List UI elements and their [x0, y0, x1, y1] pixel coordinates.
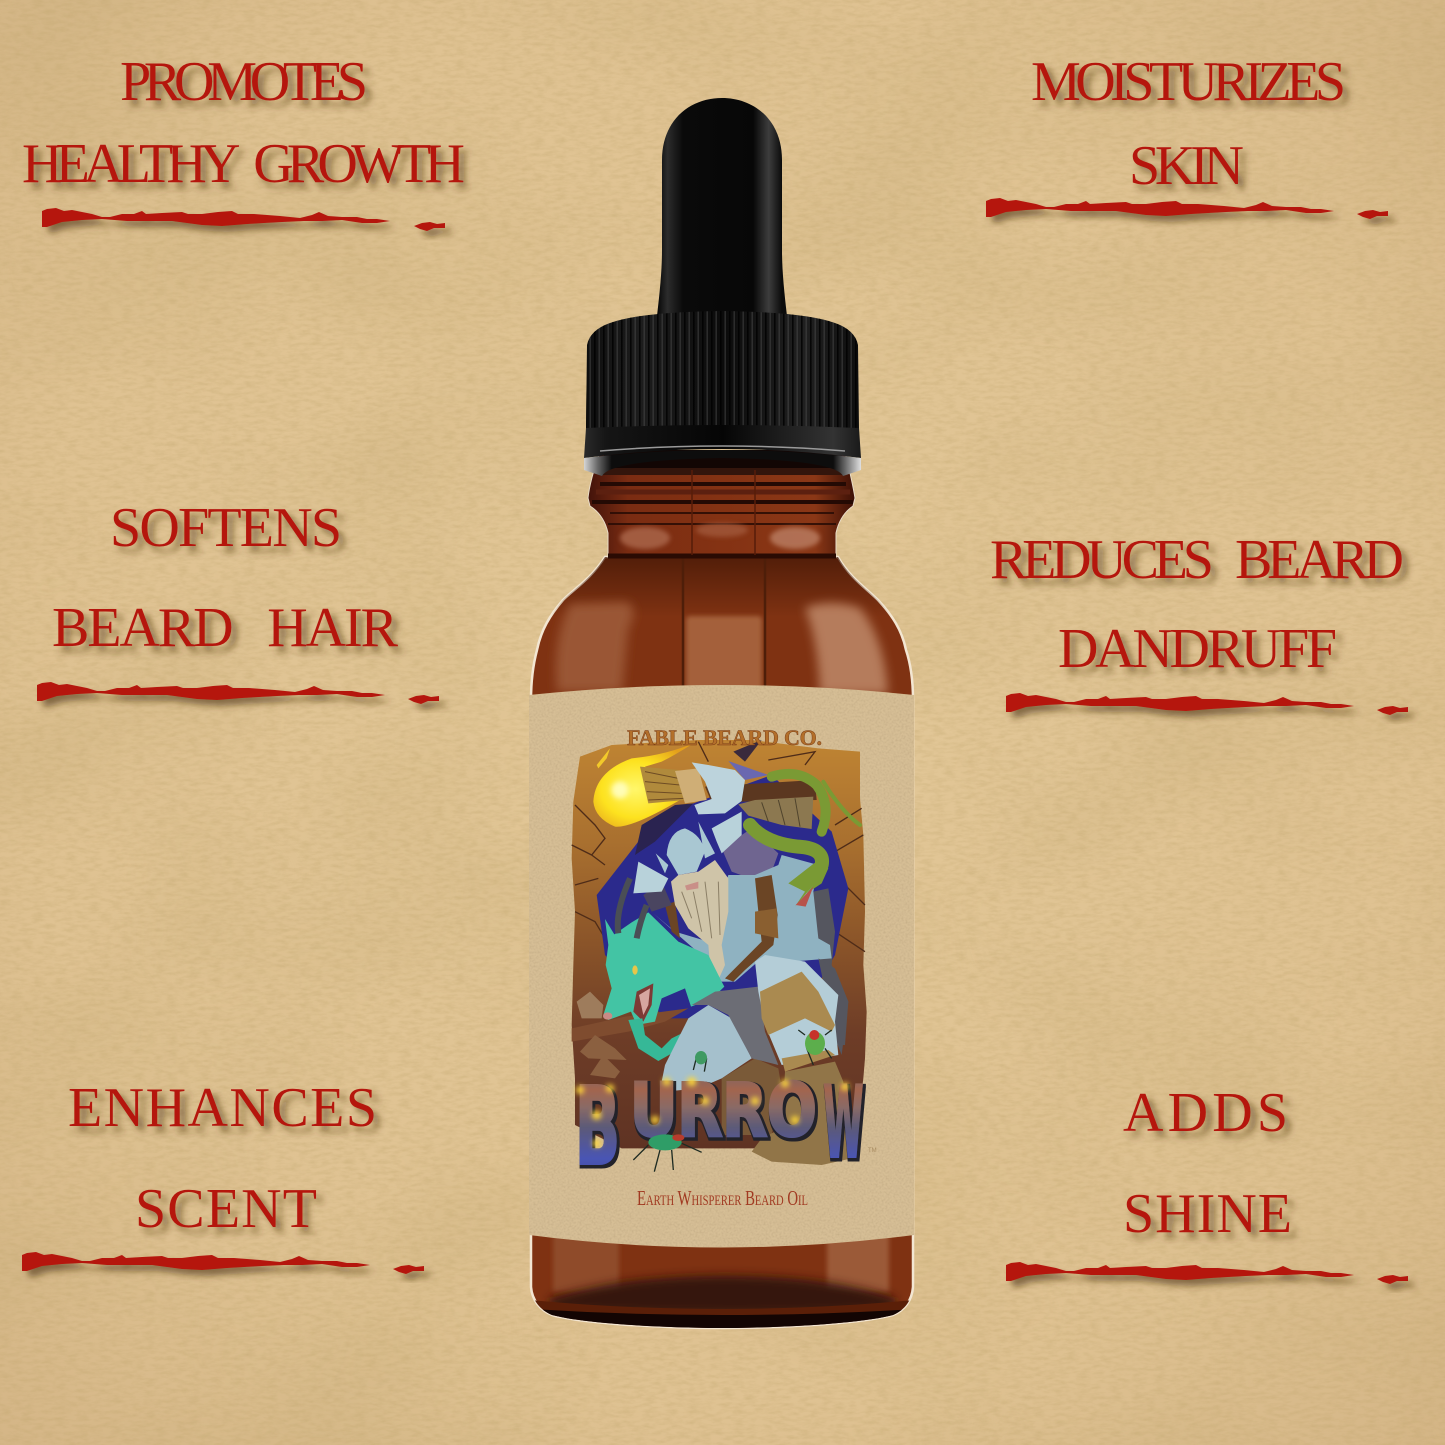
torch and arm: [640, 761, 817, 829]
product subtitle: Earth Whisperer Beard Oil: [637, 1186, 808, 1210]
benefit: reduces beard dandruff: DANDRUFF: [1058, 618, 1337, 680]
benefit: moisturizes skin: SKIN: [1129, 135, 1244, 197]
benefit: reduces beard dandruff: REDUCES BEARD: [990, 529, 1404, 591]
fire: [593, 743, 693, 827]
brand name: FABLE BEARD CO.: [627, 725, 822, 750]
benefit: adds shine: SHINE: [1123, 1183, 1292, 1245]
grey fur: [813, 888, 848, 1045]
benefit: softens beard hair: [37, 497, 439, 704]
floor rocks: [572, 992, 688, 1078]
benefit: softens beard hair: SOFTENS: [110, 497, 342, 559]
benefit: adds shine: ADDS: [1123, 1082, 1288, 1144]
dark blue cavern: [597, 775, 848, 1018]
benefit: enhances scent: SCENT: [135, 1178, 317, 1240]
trademark: TM: [868, 1148, 877, 1154]
dwarf face: [656, 822, 715, 875]
beard: [671, 860, 728, 980]
glass neck: [588, 450, 855, 557]
base shading: [553, 1230, 619, 1292]
bottom beetle: [633, 1134, 702, 1172]
beetles on legs: [693, 1030, 832, 1072]
rubber bulb: [657, 98, 787, 316]
ribbed cap: [584, 311, 861, 476]
dropper bottle: W: [823, 1067, 863, 1181]
glass body: [530, 557, 915, 1330]
wolf: [603, 878, 724, 1061]
green snake: [750, 774, 860, 907]
cave wall: [572, 740, 867, 1148]
benefit: promotes healthy growth: [22, 51, 465, 231]
legs: [662, 955, 858, 1165]
benefit: moisturizes skin: MOISTURIZES: [1031, 51, 1346, 113]
purple fur cape: [722, 828, 778, 879]
benefit: promotes healthy growth: HEALTHY GROWTH: [22, 133, 465, 195]
product title: B: [575, 1065, 620, 1190]
dropper bottle: [529, 98, 915, 1330]
benefit: adds shine: [1006, 1082, 1408, 1284]
sparkles: [576, 1077, 849, 1147]
label illustration: [572, 740, 867, 1190]
product title: URRO: [630, 1069, 817, 1154]
kraft paper label: [529, 685, 914, 1248]
gray fur and spikes: [643, 882, 672, 912]
benefit: reduces beard dandruff: [990, 529, 1408, 715]
benefit: enhances scent: ENHANCES: [68, 1077, 377, 1139]
benefit: moisturizes skin: [986, 51, 1388, 219]
torso: [653, 855, 832, 982]
benefit: enhances scent: [22, 1077, 424, 1274]
benefit: softens beard hair: BEARD HAIR: [52, 597, 399, 659]
benefit: promotes healthy growth: PROMOTES: [120, 51, 368, 113]
